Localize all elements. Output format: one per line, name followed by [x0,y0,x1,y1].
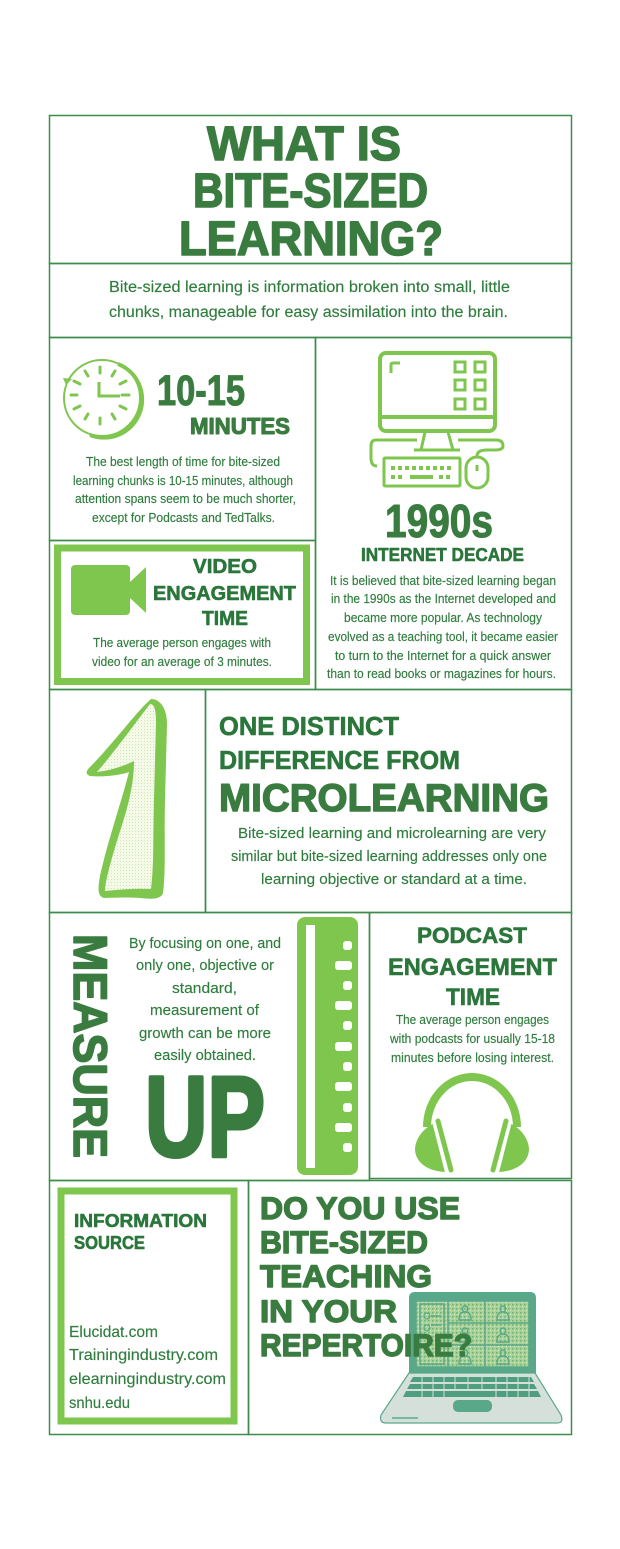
text: best length [73,455,296,525]
panel: 10-15 minutes [50,338,316,540]
panel: 1990s [316,338,572,690]
heading: video engagement time: ENGAGEMENT [153,583,296,605]
heading: podcast engagement time: PODCAST [417,923,528,948]
panel: one distinct difference [206,690,572,912]
text: measure detail [129,935,281,1064]
text: 1990s history: became more popular. As technology [344,611,543,625]
text: 1990s history: It is believed that bite-sized learning began [330,574,556,588]
text: best length: attention spans seem to be much shorter, [75,492,296,506]
icon: laptop [381,1292,562,1423]
stat: 1990s: 1990s [385,495,493,547]
text: definition [109,279,510,321]
icon: ruler [297,917,358,1175]
text: 1990s history: to turn to the Internet for a quick answer [335,649,551,663]
heading: video engagement time: VIDEO [193,556,257,578]
text: video average [92,636,272,669]
heading: podcast engagement time: TIME [446,984,500,1011]
text: best length: except for Podcasts and TedTalks. [92,511,275,525]
text: measure detail: standard, [172,980,237,997]
panel: measure up [50,912,370,1181]
stat: 10-15: 10-15 [157,367,245,415]
text: podcast average: minutes before losing interest. [391,1051,554,1065]
heading: do you use bite-sized teaching: REPERTOIRE? [260,1327,472,1363]
heading: do you use bite-sized teaching: BITE-SIZED [260,1224,428,1260]
text: definition: Bite-sized learning is information broken into small, little [109,279,510,296]
list: sources: snhu.edu [69,1395,130,1412]
label: internet decade: INTERNET DECADE [361,544,524,565]
frame: source box [61,1191,234,1421]
text: 1990s history: evolved as a teaching tool, it became easier [328,630,558,644]
heading: do you use bite-sized teaching [260,1190,472,1363]
label: minutes: MINUTES [190,413,290,439]
heading: information source [74,1210,207,1253]
text: difference detail [231,826,547,888]
panel: video engagement [50,540,316,690]
heading: do you use bite-sized teaching: DO YOU USE [260,1190,460,1226]
text: best length: The best length of time for bite-sized [86,455,280,469]
icon: headphones [415,1077,529,1172]
heading: what is bite-sized learning [179,118,443,266]
list: sources: Elucidat.com [69,1324,158,1341]
text: difference detail: learning objective or standard at a time. [261,872,527,888]
text: difference detail: Bite-sized learning and microlearning are very [238,826,547,842]
text: difference detail: similar but bite-sized learning addresses only one [231,849,547,865]
list: sources: Trainingindustry.com [69,1347,218,1364]
text: 1990s history: in the 1990s as the Internet developed and [331,592,556,606]
text: measure detail: By focusing on one, and [129,935,281,952]
text: measure detail: only one, objective or [136,957,274,974]
panel: do you use [248,1180,572,1434]
heading: what is bite-sized learning: BITE-SIZED [193,165,428,218]
text: video average: The average person engages with [93,636,271,650]
heading: one distinct difference from microlearning: ONE DISTINCT [219,713,399,741]
heading: video engagement time [153,556,296,630]
icon: desktop computer [371,353,503,488]
heading: what is bite-sized learning: WHAT IS [207,118,401,171]
heading: what is bite-sized learning: LEARNING? [179,213,443,266]
icon: video camera [71,565,146,615]
text: best length: learning chunks is 10-15 minutes, although [73,474,293,488]
heading: up: UP [145,1054,265,1181]
text: measure detail: growth can be more [139,1025,271,1042]
list: sources [69,1324,226,1412]
text: measure detail: easily obtained. [154,1047,256,1064]
heading: one distinct difference from microlearning: DIFFERENCE FROM [219,747,460,775]
heading: one distinct difference from microlearning: MICROLEARNING [219,777,549,820]
text: podcast average: with podcasts for usually 15-18 [389,1032,555,1046]
frame: video box [58,548,306,682]
heading: podcast engagement time [388,923,557,1011]
heading: one distinct difference from microlearning [219,713,549,820]
text: 1990s history [327,574,558,681]
heading: do you use bite-sized teaching: TEACHING [260,1258,432,1294]
text: definition: chunks, manageable for easy assimilation into the brain. [109,304,508,321]
list: sources: elearningindustry.com [69,1371,226,1388]
panel: title [50,116,572,266]
heading: information source: INFORMATION [74,1210,207,1231]
heading: information source: SOURCE [74,1232,145,1253]
panel: podcast engagement [370,912,572,1178]
panel: definition [50,264,572,338]
text: measure detail: measurement of [150,1002,260,1019]
text: video average: video for an average of 3 minutes. [92,655,272,669]
text: podcast average: The average person engages [396,1013,549,1027]
heading: do you use bite-sized teaching: IN YOUR [260,1293,397,1329]
icon: numeral 1 [87,699,167,899]
heading: podcast engagement time: ENGAGEMENT [388,954,557,981]
panel: information source [50,1180,248,1434]
text: podcast average [389,1013,555,1065]
panel: numeral one [50,690,206,912]
text: 1990s history: than to read books or magazines for hours. [327,667,556,681]
icon: clock [63,360,142,438]
heading: video engagement time: TIME [202,608,248,630]
heading: measure (rotated): MEASURE [64,934,117,1158]
